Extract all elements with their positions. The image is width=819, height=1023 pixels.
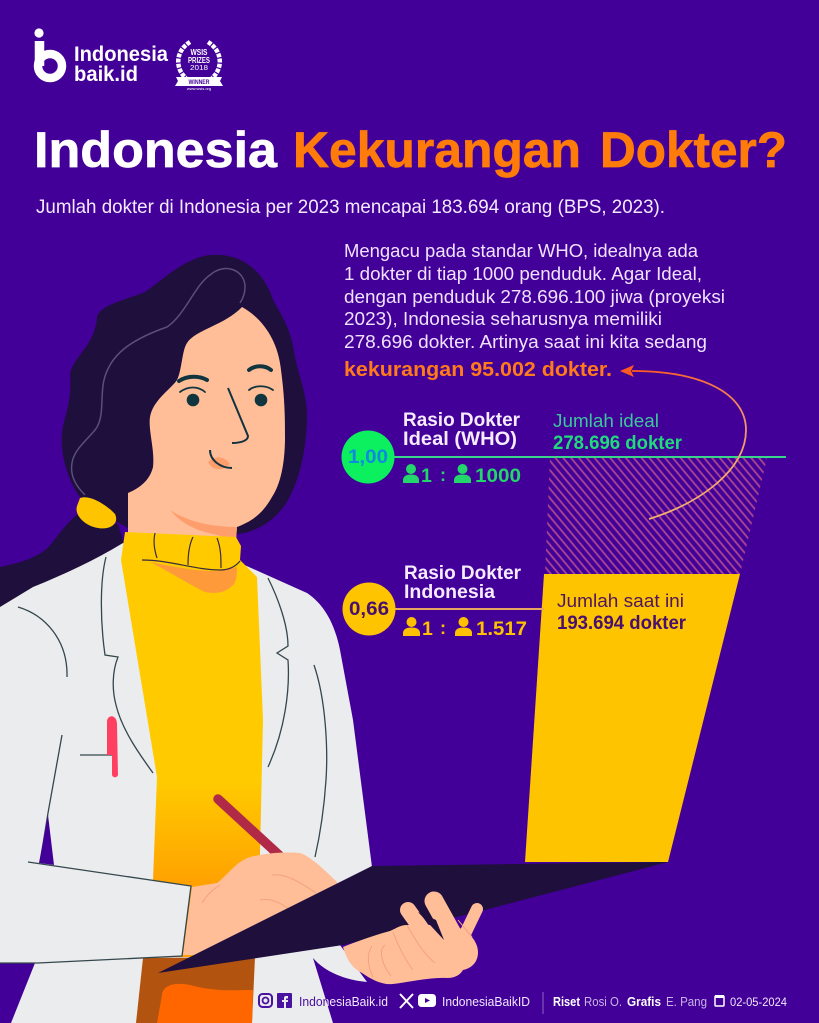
pen [218,799,280,856]
icon: Instagram [259,994,272,1007]
icon: Facebook [277,993,292,1008]
writing hand [183,852,340,955]
footer [259,992,788,1014]
hair strand [72,269,245,495]
holding hand [343,901,478,984]
pocket pen [107,716,118,777]
ratio block: ideal WHO: 1000 [475,465,521,487]
footer handle: social: IndonesiaBaikID [442,995,530,1009]
credits: Grafis [627,995,661,1009]
paragraph: WHO standard explanation: Mengacu pada standar WHO, idealnya ada [344,240,699,261]
paragraph: WHO standard explanation: 1 dokter di tiap 1000 penduduk. Agar Ideal, [344,263,702,284]
hand creases [202,875,316,910]
label: ideal number: Jumlah ideal [553,410,659,431]
ratio block: Indonesia: 0,66 [349,599,389,620]
label: current number: 193.694 dokter [557,613,687,634]
ratio block: ideal WHO [342,410,521,487]
icon: X [400,994,413,1008]
badge: WSIS Prizes 2018 winner: 2018 [190,65,208,72]
lab coat [0,543,372,1023]
collar shadow [150,562,237,593]
paragraph: WHO standard explanation [344,240,725,381]
title: Indonesia [34,122,278,178]
hair band [77,497,116,528]
ratio block: Indonesia: 1.517 [476,618,527,640]
paragraph: WHO standard explanation: 278.696 dokter. Artinya saat ini kita sedang [344,331,707,352]
ponytail [0,512,125,612]
logo: Indonesia Baik: baik.id [74,63,138,86]
sweater [121,532,263,957]
chin shadow [170,510,237,540]
finger creases [368,920,472,977]
badge: WSIS Prizes 2018 winner [175,42,223,91]
hair [62,255,307,534]
paragraph: WHO standard explanation: dengan penduduk 278.696.100 jiwa (proyeksi [344,286,725,307]
collar lines [142,533,240,570]
date: 02-05-2024 [730,997,788,1009]
chart: hatched shortfall area [545,458,767,574]
ratio block: ideal WHO: Ideal (WHO) [403,429,517,450]
subtitle: Jumlah dokter di Indonesia per 2023 mencapai 183.694 orang (BPS, 2023). [36,196,665,218]
ratio block: ideal WHO: Rasio Dokter [403,410,521,431]
coat lines [18,557,327,863]
credits: Rosi O. [584,995,622,1009]
credits: Riset [553,995,581,1009]
footer handle: website: IndonesiaBaik.id [299,995,388,1009]
nose [228,388,248,443]
chart: current doctors bar [525,574,740,862]
logo: Indonesia Baik: Indonesia [74,43,168,66]
ratio block: Indonesia: 1 [422,618,433,640]
title: Dokter? [600,122,787,178]
ratio block: Indonesia: : [440,618,446,638]
arrow: shortfall to callout [620,365,746,519]
sleeve outline [0,862,191,963]
badge: WSIS Prizes 2018 winner: www.wsis.org [187,86,211,91]
eyes [187,394,267,406]
badge: WSIS Prizes 2018 winner: PRIZES [188,56,210,65]
credits: E. Pang [666,995,707,1009]
ratio block: Indonesia [342,563,544,640]
mouth [210,450,232,468]
paragraph: WHO standard explanation: 2023), Indonesia seharusnya memiliki [344,308,662,329]
ratio block: ideal WHO: 1,00 [348,447,388,468]
badge: WSIS Prizes 2018 winner: WINNER [188,79,210,86]
face and neck [128,307,285,540]
clipboard [158,862,668,973]
ratio block: Indonesia: Rasio Dokter [404,563,522,584]
ratio block: ideal WHO: 1 [421,465,432,487]
title [34,122,787,178]
label: current number: Jumlah saat ini [557,590,684,611]
label: ideal number [553,410,683,454]
ideal line [394,456,786,458]
icon: calendar [715,995,724,1006]
lips [208,457,230,469]
label: ideal number: 278.696 dokter [553,433,683,454]
title: Kekurangan [293,122,581,178]
logo: Indonesia Baik [34,28,168,86]
label: current number [557,590,687,634]
sweater bottom orange [157,984,253,1023]
illustration: doctor [0,255,668,1023]
icon: YouTube [418,994,436,1007]
badge: WSIS Prizes 2018 winner: WSIS [190,47,208,57]
credits [553,995,707,1009]
ratio block: ideal WHO: : [440,465,446,485]
eyebrows [179,366,273,392]
ratio block: Indonesia: Indonesia [404,582,495,603]
sleeve [0,860,191,963]
paragraph: WHO standard explanation: kekurangan 95.002 dokter. [344,358,612,381]
sweater bottom shade [136,957,255,1023]
coat gap [39,815,54,865]
